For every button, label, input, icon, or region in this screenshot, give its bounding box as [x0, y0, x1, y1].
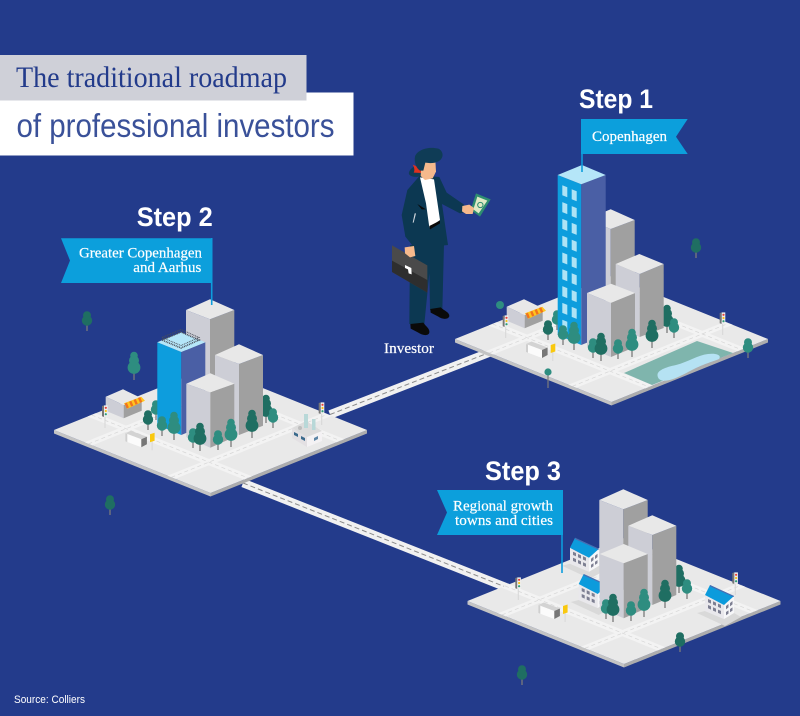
bus stop and sign — [125, 431, 155, 450]
city platform — [455, 276, 768, 406]
traffic lights — [503, 312, 725, 338]
flag: Greater Copenhagen and Aarhus — [61, 238, 212, 283]
title line 2: of professional investors — [16, 107, 334, 144]
briefcase — [392, 245, 427, 293]
banknotes — [471, 193, 491, 217]
panel: step 3 Regional growth towns and cities — [437, 456, 780, 685]
heading: step 2: Step 2 — [137, 202, 213, 232]
back building — [186, 299, 234, 390]
hair — [415, 148, 443, 171]
panel: step 1 Copenhagen — [455, 84, 768, 406]
traffic lights — [515, 572, 738, 600]
face — [421, 160, 436, 180]
back building — [587, 209, 635, 300]
middle building — [616, 254, 664, 337]
bus stop and sign — [526, 342, 555, 361]
flag: Regional growth towns and cities: towns and cities — [455, 513, 553, 529]
bus stop and sign — [538, 602, 568, 622]
flag: Regional growth towns and cities — [437, 490, 563, 535]
source note: Source: Colliers — [14, 694, 85, 706]
panel: step 2 Greater Copenhagen and Aarhus — [54, 202, 367, 515]
hand on briefcase — [405, 246, 415, 257]
loose trees — [517, 565, 685, 685]
flag: Greater Copenhagen and Aarhus: Greater Copenhagen — [79, 246, 202, 262]
title line 1: The traditional roadmap — [16, 61, 287, 94]
front building — [600, 544, 648, 618]
houses behind buildings — [562, 538, 615, 615]
flag: Copenhagen: Copenhagen — [592, 129, 667, 145]
flag: Regional growth towns and cities: Regional growth — [453, 498, 553, 514]
title line 1 — [0, 55, 306, 100]
legs — [409, 244, 444, 324]
connecting road: step 2 to step 1 — [330, 352, 492, 414]
loose trees — [82, 311, 272, 515]
flag pole — [211, 238, 213, 305]
investor figure — [392, 148, 491, 335]
heading: step 3: Step 3 — [485, 456, 561, 486]
shop — [507, 299, 546, 328]
front trees — [601, 579, 692, 622]
loose trees — [496, 238, 753, 388]
connecting road: step 2 to step 3 — [243, 483, 508, 588]
back building — [599, 489, 648, 590]
flag pole — [581, 119, 583, 172]
title line 2 — [0, 92, 354, 156]
front trees — [543, 318, 679, 361]
middle building — [215, 344, 263, 435]
city platform — [54, 367, 367, 496]
front building — [186, 373, 234, 448]
blue tower under construction — [157, 330, 205, 435]
shirt — [413, 177, 440, 229]
flag: Greater Copenhagen and Aarhus: and Aarhus — [133, 260, 201, 276]
blue tower — [558, 165, 606, 345]
shoes — [410, 307, 449, 335]
flag pole — [561, 490, 563, 573]
hair back and red tie — [409, 165, 423, 177]
park with pond — [624, 341, 733, 385]
investor label: Investor — [384, 341, 434, 357]
heading: step 1: Step 1 — [579, 84, 653, 114]
house at right — [697, 585, 741, 626]
middle building — [628, 515, 676, 605]
shop — [106, 389, 145, 418]
front trees — [143, 408, 278, 451]
flag: Copenhagen — [581, 119, 688, 154]
front building — [587, 284, 635, 357]
city platform — [468, 538, 780, 668]
traffic lights — [102, 402, 324, 428]
title — [0, 55, 354, 156]
hand with money — [462, 205, 474, 214]
jacket — [402, 175, 466, 247]
factory — [292, 414, 322, 447]
